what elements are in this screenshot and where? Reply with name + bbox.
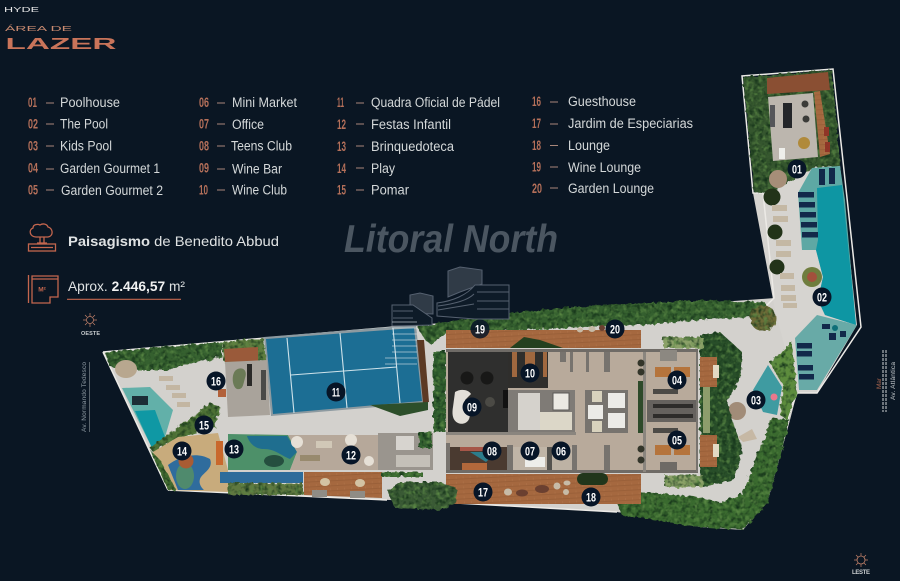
legend: column 3: 15 <box>337 182 346 198</box>
compass: oeste: OESTE <box>81 331 100 337</box>
top hedge <box>417 300 768 345</box>
light green planters <box>663 337 703 487</box>
left garden hedge <box>105 342 222 370</box>
legend: column 4: 19 <box>532 160 541 174</box>
map marker 15: 15 <box>199 418 209 432</box>
legend: column 2: 07 <box>199 116 209 132</box>
panel: 14 play <box>150 433 228 492</box>
legend: column 2: 06 <box>199 95 209 110</box>
legend: column 3: Festas Infantil <box>371 117 451 132</box>
legend: column 3: Quadra Oficial de Pádel <box>371 95 500 110</box>
panel: 12 festas infantil <box>288 432 433 470</box>
map marker 15 <box>194 416 214 434</box>
map marker 17: 17 <box>478 486 488 500</box>
map marker 14 <box>172 442 192 460</box>
map marker 03: 03 <box>751 394 761 408</box>
upper and lower service rooms <box>560 350 610 473</box>
panel: 11 padel court <box>264 325 424 416</box>
rooms: 09 wine bar and 10 wine club <box>448 350 548 432</box>
icon: area m2 <box>28 275 58 303</box>
legend: column 2: 08 <box>199 138 209 154</box>
map marker 12 <box>342 446 360 464</box>
map marker 06: 06 <box>556 444 566 458</box>
decks beside lounges <box>700 357 719 467</box>
legend: column 2: Mini Market <box>232 95 297 110</box>
map marker 20: 20 <box>610 322 620 336</box>
map marker 02 <box>812 288 832 306</box>
map marker 09: 09 <box>467 400 477 414</box>
map marker 01: 01 <box>792 162 802 176</box>
wood strip and hedge by court <box>370 340 429 416</box>
landscaping credit: Paisagismo de Benedito Abbud <box>68 233 279 249</box>
map marker 04: 04 <box>672 374 682 388</box>
poolhouse arm ground <box>753 165 857 393</box>
wood deck south and planting <box>304 472 456 510</box>
central core <box>508 390 628 433</box>
map marker 12: 12 <box>346 448 356 462</box>
legend: column 2 <box>199 95 297 198</box>
compass: oeste <box>81 313 100 337</box>
legend: column 3: 11 <box>337 95 344 110</box>
legend: column 4: Guesthouse <box>568 94 636 109</box>
legend: column 3: 14 <box>337 161 346 176</box>
right garden hedges <box>700 332 743 487</box>
map marker 19: 19 <box>475 322 485 336</box>
legend: column 2: Teens Club <box>231 138 292 154</box>
map marker 10 <box>520 364 540 382</box>
bottom hedge <box>617 418 790 530</box>
kids pool area <box>728 342 797 442</box>
map marker 07 <box>520 442 540 460</box>
map marker 02: 02 <box>817 290 827 304</box>
map marker 08 <box>482 442 502 460</box>
legend: column 1: 03 <box>28 138 38 154</box>
rooms: 04 and 05 gardens gourmet <box>638 350 698 472</box>
map marker 18: 18 <box>586 490 596 504</box>
street label: east: Av. Atlântica <box>890 362 897 400</box>
poolhouse garden <box>743 70 840 193</box>
legend: column 4 <box>532 94 693 196</box>
street label: east <box>876 350 897 412</box>
total area: Aprox. 2.446,57 m² <box>68 278 185 294</box>
map marker 10: 10 <box>525 366 535 380</box>
map marker 11 <box>326 382 346 402</box>
legend: column 3 <box>337 95 500 198</box>
panel: west pool <box>115 360 190 448</box>
legend: column 3: Play <box>371 161 395 176</box>
panel: 01 poolhouse <box>767 72 830 161</box>
legend: column 2: Office <box>232 117 264 132</box>
legend: column 4: Lounge <box>568 138 610 153</box>
legend: column 3: 13 <box>337 139 346 154</box>
legend: column 4: 20 <box>532 181 542 196</box>
title <box>5 24 116 53</box>
legend: column 4: Wine Lounge <box>568 160 641 175</box>
map marker 17 <box>474 482 492 502</box>
legend: column 2: 10 <box>199 182 208 198</box>
legend: column 4: 17 <box>532 116 541 131</box>
legend: column 1: 02 <box>28 116 38 132</box>
side hedge of building <box>433 351 446 432</box>
title: ÁREA DE <box>5 24 73 33</box>
legend: column 1: The Pool <box>60 116 108 132</box>
title: LAZER <box>6 36 116 53</box>
legend: column 1: 05 <box>28 182 38 198</box>
main building floor <box>446 349 698 473</box>
street label: east: Mar <box>876 377 883 389</box>
map marker 04 <box>668 370 686 390</box>
compass: leste <box>852 553 870 576</box>
legend: column 1 <box>28 95 163 198</box>
icon: tree <box>28 224 56 251</box>
rooms: lower row 08 07 06 <box>446 349 698 473</box>
icon: area m2: M² <box>38 286 47 294</box>
map marker 13 <box>224 440 244 458</box>
panel: 13 brinquedoteca <box>216 434 303 495</box>
legend: column 4: 18 <box>532 138 541 153</box>
street label: west: Av. Normando Tedesco <box>81 362 88 432</box>
map marker 07: 07 <box>525 444 535 458</box>
legend: column 4: Garden Lounge <box>568 181 654 196</box>
watermark buildings <box>392 267 509 326</box>
legend: column 1: 04 <box>28 160 38 176</box>
legend: column 4: 16 <box>532 94 541 109</box>
legend: column 2: Wine Club <box>232 182 287 198</box>
map marker 03 <box>746 390 766 410</box>
legend: column 2: Wine Bar <box>232 162 282 176</box>
map marker 01 <box>788 160 806 178</box>
watermark overlay on court <box>385 322 417 364</box>
map marker 05: 05 <box>672 434 682 448</box>
main site ground <box>103 298 797 530</box>
legend: column 3: Pomar <box>371 182 409 198</box>
map marker 20 <box>606 320 624 338</box>
compass: leste: LESTE <box>852 570 870 576</box>
legend: column 1: Poolhouse <box>60 95 120 110</box>
legend: column 4: Jardim de Especiarias <box>568 116 693 131</box>
legend: column 3: Brinquedoteca <box>371 139 454 154</box>
map marker 18 <box>582 488 600 506</box>
wood decks <box>446 325 641 504</box>
legend: column 2: 09 <box>199 160 209 176</box>
legend: column 3: 12 <box>337 117 346 132</box>
map marker 13: 13 <box>229 442 239 456</box>
site outline <box>103 69 861 512</box>
map marker 11: 11 <box>332 386 340 400</box>
panel: 16 guesthouse <box>218 338 270 417</box>
watermark text: Litoral North <box>344 218 558 261</box>
legend: column 1: Garden Gourmet 1 <box>60 161 160 176</box>
legend: column 1: Kids Pool <box>60 138 112 154</box>
map marker 14: 14 <box>177 444 187 458</box>
panel: 02 the pool <box>795 166 857 390</box>
map marker 05 <box>668 430 686 450</box>
panel: 15 pomar hedge <box>150 403 220 452</box>
arm planting and furniture <box>764 170 822 308</box>
map marker 19 <box>470 320 490 338</box>
map marker 09 <box>462 398 482 416</box>
map marker 16: 16 <box>211 374 221 388</box>
legend: column 1: 01 <box>28 95 37 110</box>
map marker 16 <box>206 372 226 390</box>
map marker 08: 08 <box>487 444 497 458</box>
red flower bush <box>750 305 776 331</box>
map marker 06 <box>552 442 570 460</box>
legend: column 1: Garden Gourmet 2 <box>61 183 163 198</box>
brand name: HYDE <box>4 7 40 14</box>
